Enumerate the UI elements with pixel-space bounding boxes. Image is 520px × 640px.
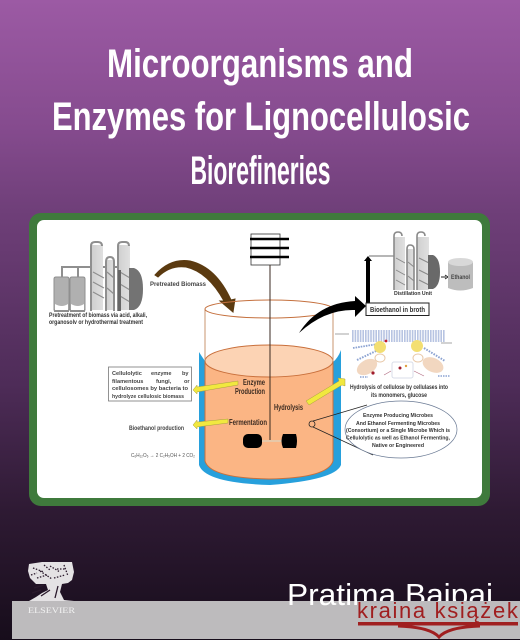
label: bioethanol production: Bioethanol production <box>129 426 184 432</box>
label box: cellulolytic enzyme: enzyme <box>151 371 172 377</box>
vessel <box>199 300 341 485</box>
callout: microbes: Enzyme Producing Microbes <box>363 413 433 419</box>
label: distillation unit: Distillation Unit <box>394 291 432 297</box>
arrow: bioethanol <box>299 296 366 333</box>
label box: cellulolytic enzyme: filamentous <box>112 379 143 385</box>
rim <box>205 300 333 318</box>
label: hydrolysis of cellulose <box>350 385 448 399</box>
arrow: to ethanol <box>441 275 448 279</box>
label: vessel stages: Fermentation <box>229 418 267 427</box>
label: vessel stages <box>229 378 303 427</box>
callout: microbes <box>309 401 457 458</box>
label: bioethanol in broth: Bioethanol in broth <box>370 307 425 314</box>
arrow: pretreated biomass <box>155 261 235 312</box>
arrow: hydrolysis to diagram <box>306 378 345 405</box>
label: hydrolysis of cellulose: Hydrolysis of cellulose by cellulases into <box>350 385 448 391</box>
band cover under watermark <box>357 601 520 639</box>
vessel wall <box>205 309 333 361</box>
icon: Elsevier tree logo <box>28 562 74 601</box>
footer band <box>12 601 520 639</box>
liquid surface <box>205 345 333 377</box>
label: reaction equation: C₆H₁₂O₆ → 2 C₂H₅OH + 2 CO₂ <box>131 453 195 459</box>
callout: microbes: And Ethanol Fermenting Microbes <box>356 421 440 427</box>
title: Biorefineries <box>190 149 330 193</box>
watermark text: kraina książek <box>357 598 520 623</box>
callout: microbes: Cellulolytic as well as Ethanol Fermenting, <box>346 436 450 442</box>
title: Microorganisms and <box>107 42 413 86</box>
label: pretreatment <box>49 313 147 326</box>
label box: cellulolytic enzyme: fungi, <box>156 379 172 385</box>
callout: microbes: Native or Engineered <box>372 443 424 449</box>
panel: process diagram <box>29 213 490 506</box>
callout: microbes: (Consortium) or a Single Microbe Which is <box>346 428 450 434</box>
label: bioethanol in broth <box>366 303 429 316</box>
label: hydrolysis of cellulose: its monomers, glucose <box>371 393 428 399</box>
label box: cellulolytic enzyme: hydrolyze cellulosic biomass <box>112 394 184 400</box>
arrow: up to distillation <box>364 256 372 303</box>
label box: cellulolytic enzyme: by <box>182 371 189 377</box>
icon: ethanol drum <box>448 258 473 290</box>
cellulose strands <box>352 331 445 341</box>
label: vessel stages: Hydrolysis <box>274 403 303 412</box>
label: pretreatment: organosolv or hydrothermal treatment <box>49 320 143 326</box>
title <box>52 42 470 193</box>
author name: Pratima Bajpai <box>287 577 493 612</box>
icon: distillation unit <box>369 232 440 290</box>
label box: cellulolytic enzyme: Cellulolytic <box>112 371 142 377</box>
stirrer <box>243 234 297 448</box>
label: vessel stages: Production <box>235 387 265 396</box>
logo wordmark: ELSEVIER: ELSEVIER <box>28 606 76 615</box>
blue jacket <box>199 350 341 485</box>
label box: cellulolytic enzyme: cellulosomes by bacteria to <box>112 386 189 392</box>
label: pretreated biomass: Pretreated Biomass <box>150 281 207 288</box>
arrow: fermentation to bioethanol <box>193 419 228 429</box>
label box: cellulolytic enzyme: or <box>184 379 190 385</box>
diagram: cellulose hydrolysis <box>335 331 452 379</box>
label: vessel stages: Enzyme <box>243 378 265 387</box>
label box: cellulolytic enzyme <box>108 367 192 401</box>
icon: ethanol drum: Ethanol <box>451 275 470 281</box>
liquid <box>205 361 333 479</box>
enzymes <box>374 341 386 353</box>
arrow: enzyme to box <box>193 381 238 394</box>
watermark rule and book mark <box>358 622 518 637</box>
label: pretreatment: Pretreatment of biomass via acid, alkali, <box>49 313 147 319</box>
icon: pretreatment plant <box>54 242 143 312</box>
